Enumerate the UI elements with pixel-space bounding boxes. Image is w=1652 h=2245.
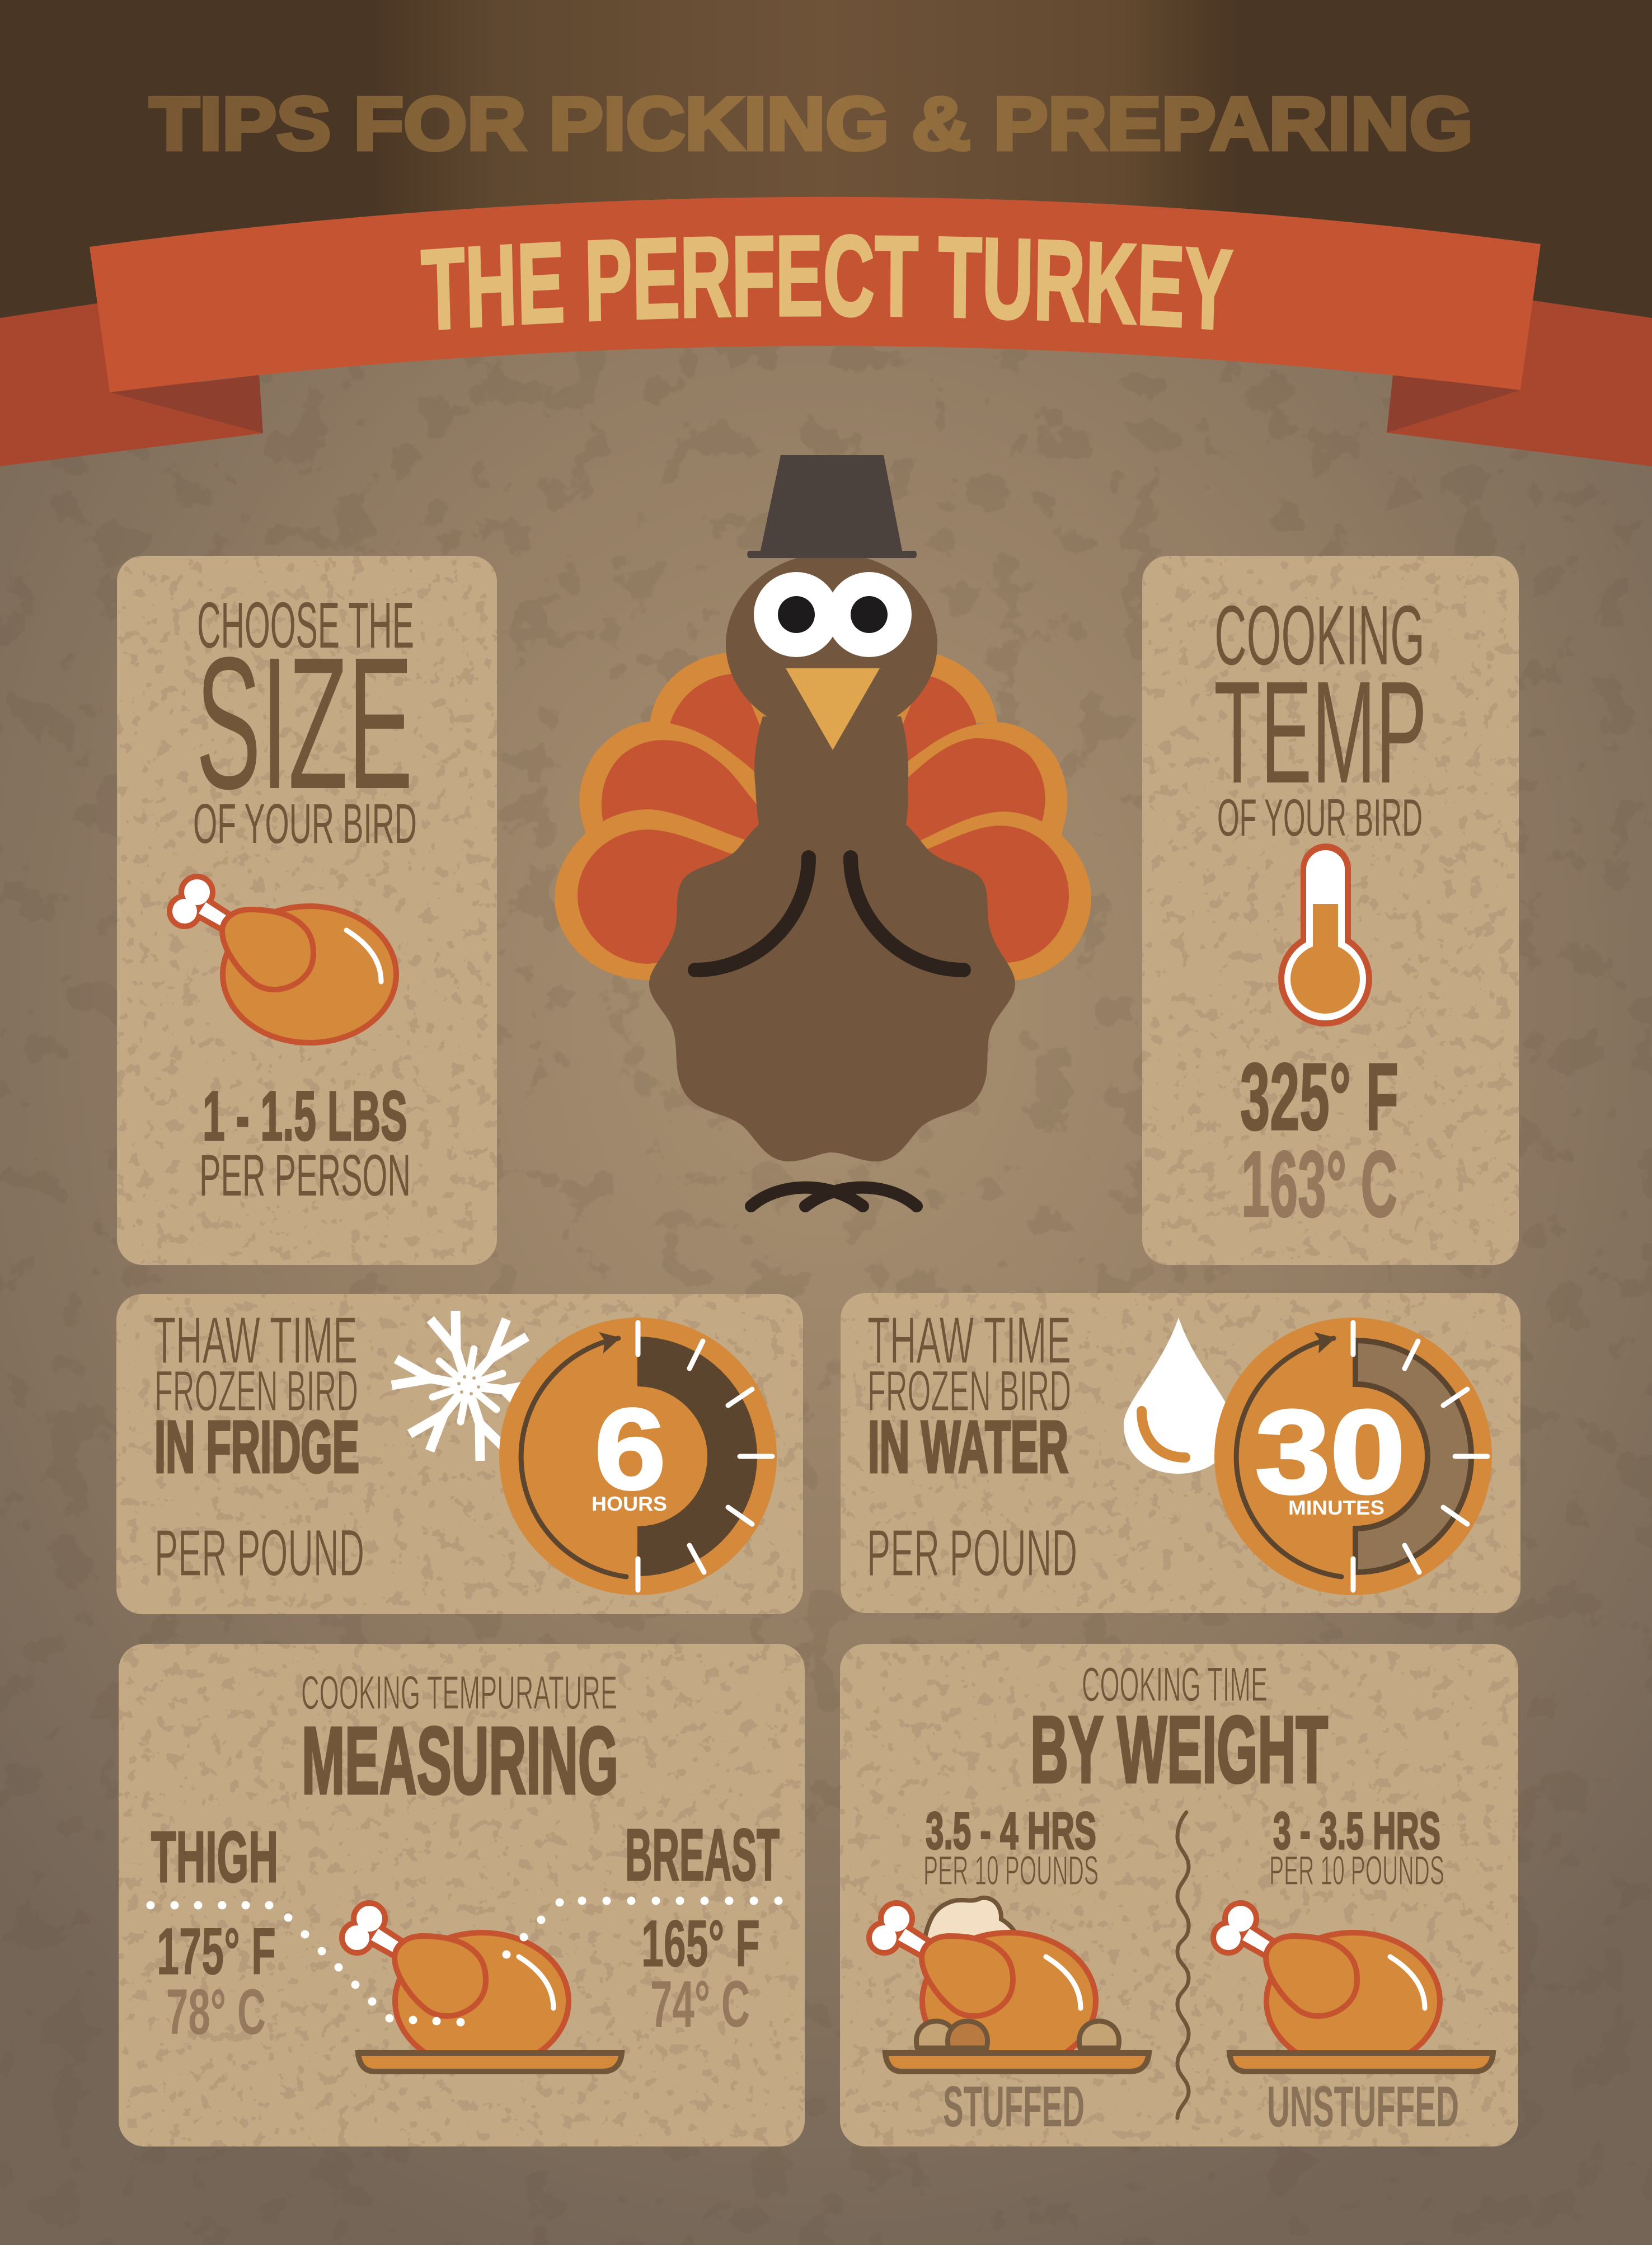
number: 30: 30: [1255, 1385, 1405, 1518]
turkey feet: [751, 1188, 917, 1206]
dotted line: breast: [503, 1896, 782, 1959]
value: 78 C: 78° C: [166, 1976, 266, 2048]
clock half ring: [1355, 1341, 1471, 1572]
value: 175 F: 175° F: [157, 1915, 276, 1989]
clock arrow: [521, 1332, 626, 1577]
value: 3 to 3.5 hrs: 3 - 3.5 HRS: [1273, 1801, 1440, 1860]
icon: water drop: [1124, 1318, 1233, 1474]
panel: measuring: [119, 1644, 805, 2146]
icon: stuffed turkey on plate: [872, 1906, 1149, 2071]
ribbon left tail: [0, 303, 263, 466]
value: 163 C: 163° C: [1241, 1132, 1397, 1236]
icon: snowflake: [392, 1311, 537, 1461]
icon: stuffing: [925, 1898, 1015, 1959]
text: in fridge: IN FRIDGE: [154, 1405, 359, 1488]
heading: by weight: BY WEIGHT: [1030, 1696, 1328, 1802]
text: cooking time: COOKING TIME: [1082, 1658, 1268, 1712]
ribbon title text: [421, 234, 1233, 330]
ribbon right fold: [1387, 375, 1520, 433]
label: breast: BREAST: [625, 1813, 780, 1896]
panel: choose the size: [117, 556, 497, 1265]
heading: temp: TEMP: [1214, 652, 1427, 814]
heading: size: SIZE: [196, 618, 413, 828]
icon: thermometer: [1278, 843, 1372, 1027]
text: per 10 pounds unstuffed: PER 10 POUNDS: [1269, 1848, 1444, 1894]
pilgrim hat: [747, 455, 917, 558]
clock: 30 minutes: [1214, 1318, 1492, 1595]
label: stuffed: STUFFED: [943, 2074, 1085, 2139]
ribbon left fold: [110, 375, 263, 433]
number: 6: 6: [594, 1385, 666, 1513]
turkey beak: [786, 668, 880, 750]
panel: by weight: [840, 1644, 1518, 2146]
label: thigh: THIGH: [151, 1817, 278, 1897]
heading: measuring: MEASURING: [302, 1708, 618, 1814]
ribbon front: [90, 197, 1541, 392]
text: per person: PER PERSON: [199, 1143, 411, 1208]
amount: 1 to 1.5 lbs: 1 - 1.5 LBS: [203, 1077, 407, 1155]
text: frozen bird: FROZEN BIRD: [154, 1359, 358, 1423]
clock arrow: [1236, 1332, 1341, 1577]
turkey head: [726, 553, 937, 735]
heading: of your bird: OF YOUR BIRD: [193, 793, 417, 855]
text: thaw time: THAW TIME: [867, 1304, 1071, 1377]
wavy divider: [1177, 1812, 1189, 2118]
value: 165 F: 165° F: [641, 1907, 760, 1981]
label: hours: HOURS: [592, 1492, 667, 1515]
panel: thaw in water: [841, 1293, 1520, 1613]
dotted line: thigh: [147, 1901, 464, 2026]
text: frozen bird: FROZEN BIRD: [867, 1359, 1071, 1423]
ribbon banner: [0, 197, 1652, 466]
label: minutes: MINUTES: [1288, 1496, 1385, 1519]
title: tips for picking and preparing: TIPS FOR PICKING & PREPARING: [149, 82, 1473, 166]
heading: choose the: CHOOSE THE: [197, 589, 414, 662]
value: 3.5 to 4 hrs: 3.5 - 4 HRS: [926, 1801, 1096, 1860]
text: per pound: PER POUND: [154, 1516, 364, 1590]
text: per 10 pounds stuffed: PER 10 POUNDS: [923, 1848, 1099, 1894]
header band: [0, 0, 1652, 343]
label: unstuffed: UNSTUFFED: [1267, 2074, 1459, 2139]
text: per pound: PER POUND: [867, 1516, 1077, 1590]
icon: unstuffed turkey on plate: [1216, 1906, 1493, 2071]
icon: turkey on plate: [345, 1906, 622, 2071]
text: cooking tempurature: COOKING TEMPURATURE: [301, 1666, 617, 1719]
turkey body: [649, 716, 1015, 1161]
panel: thaw in fridge: [116, 1294, 803, 1614]
ribbon right tail: [1387, 301, 1652, 466]
tail feathers: [555, 652, 1091, 981]
turkey eyes: [754, 572, 912, 657]
turkey illustration: [555, 455, 1091, 1206]
clock: 6 hours: [499, 1318, 777, 1595]
text: in water: IN WATER: [868, 1405, 1068, 1488]
turkey wings: [695, 857, 964, 970]
ribbon title text: THE PERFECT TURKEY: [421, 234, 1233, 330]
panel: cooking temp: [1142, 556, 1519, 1265]
text: thaw time: THAW TIME: [153, 1304, 358, 1377]
heading: of your bird: OF YOUR BIRD: [1217, 788, 1423, 847]
value: 74 C: 74° C: [650, 1967, 750, 2041]
heading: cooking: COOKING: [1214, 588, 1425, 682]
value: 325 F: 325° F: [1240, 1044, 1398, 1150]
icon: potatoes: [916, 2021, 1119, 2048]
clock half ring: [637, 1337, 757, 1576]
icon: turkey: [172, 879, 396, 1043]
